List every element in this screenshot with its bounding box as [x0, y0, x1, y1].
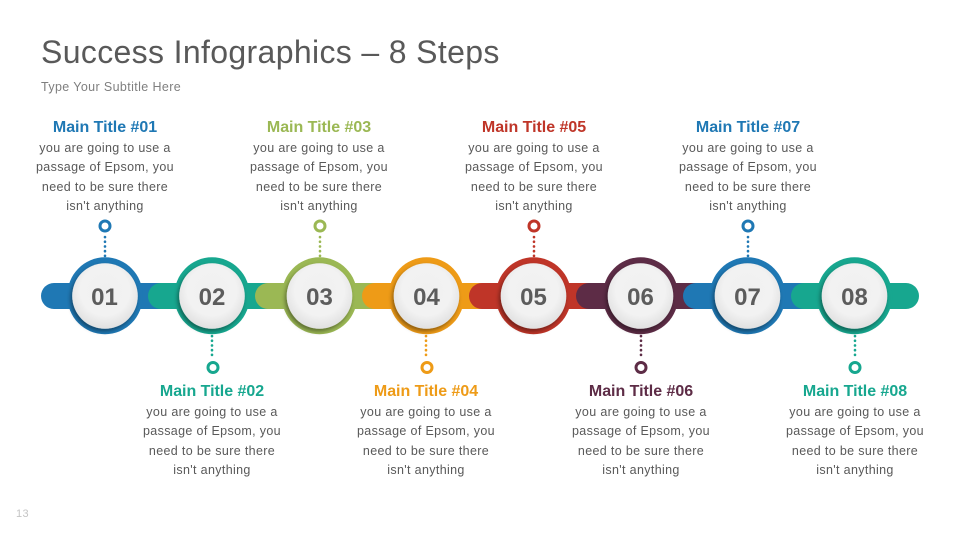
text block: step 01: Main Title #01	[53, 119, 157, 136]
step 04 node	[389, 257, 464, 372]
step 01 node	[67, 221, 143, 334]
text block: step 08: need to be sure there	[792, 444, 918, 458]
step 02 node	[174, 257, 250, 372]
step 08 node	[817, 257, 892, 372]
text block: step 02: Main Title #02	[160, 383, 264, 400]
text block: step 01: passage of Epsom, you	[36, 160, 174, 174]
text block: step 07: Main Title #07	[696, 119, 800, 136]
text block: step 07: isn't anything	[709, 199, 787, 213]
step 07 node	[710, 221, 785, 334]
text block: step 08: isn't anything	[816, 463, 894, 477]
text block: step 03: need to be sure there	[256, 180, 382, 194]
text block: step 08	[786, 383, 924, 477]
text block: step 03: passage of Epsom, you	[250, 160, 388, 174]
step 06 node: 06	[627, 284, 654, 311]
text block: step 06: need to be sure there	[578, 444, 704, 458]
text block: step 06: isn't anything	[602, 463, 680, 477]
text block: step 03	[250, 119, 388, 213]
text block: step 07: passage of Epsom, you	[679, 160, 817, 174]
step 02 node: 02	[199, 284, 225, 311]
text block: step 02: need to be sure there	[149, 444, 275, 458]
text block: step 05	[465, 119, 603, 213]
text block: step 05: need to be sure there	[471, 180, 597, 194]
connecting bar segments	[41, 283, 919, 309]
step 03 node: 03	[306, 284, 333, 311]
text block: step 05: isn't anything	[495, 199, 573, 213]
text block: step 08: Main Title #08	[803, 383, 907, 400]
text block: step 03: Main Title #03	[267, 119, 371, 136]
page number: 13	[16, 508, 29, 520]
step 05 node: 05	[520, 284, 547, 311]
text block: step 07	[679, 119, 817, 213]
text block: step 04: you are going to use a	[360, 405, 492, 419]
text block: step 01: isn't anything	[66, 199, 144, 213]
text block: step 01: you are going to use a	[39, 141, 171, 155]
step 08 node: 08	[841, 284, 868, 311]
text block: step 06: Main Title #06	[589, 383, 693, 400]
text block: step 03: you are going to use a	[253, 141, 385, 155]
step 03 node	[282, 221, 357, 334]
text block: step 04: passage of Epsom, you	[357, 424, 495, 438]
step 01 node: 01	[91, 284, 118, 311]
text block: step 04: need to be sure there	[363, 444, 489, 458]
step 04 node: 04	[413, 284, 440, 311]
text block: step 05: Main Title #05	[482, 119, 586, 136]
step 05 node	[496, 221, 571, 334]
title: Success Infographics – 8 Steps	[41, 34, 500, 70]
text block: step 08: you are going to use a	[789, 405, 921, 419]
text block: step 07: you are going to use a	[682, 141, 814, 155]
text block: step 02	[143, 383, 281, 477]
step 06 node	[603, 257, 678, 372]
text block: step 02: passage of Epsom, you	[143, 424, 281, 438]
text block: step 01: need to be sure there	[42, 180, 168, 194]
text block: step 08: passage of Epsom, you	[786, 424, 924, 438]
subtitle: Type Your Subtitle Here	[41, 80, 181, 94]
text block: step 05: passage of Epsom, you	[465, 160, 603, 174]
text block: step 04: isn't anything	[387, 463, 465, 477]
text block: step 04: Main Title #04	[374, 383, 478, 400]
text block: step 02: you are going to use a	[146, 405, 278, 419]
text block: step 04	[357, 383, 495, 477]
text block: step 07: need to be sure there	[685, 180, 811, 194]
text block: step 05: you are going to use a	[468, 141, 600, 155]
text block: step 01	[36, 119, 174, 213]
text block: step 06	[572, 383, 710, 477]
text block: step 03: isn't anything	[280, 199, 358, 213]
text block: step 02: isn't anything	[173, 463, 251, 477]
text block: step 06: passage of Epsom, you	[572, 424, 710, 438]
step 07 node: 07	[734, 284, 761, 311]
text block: step 06: you are going to use a	[575, 405, 707, 419]
